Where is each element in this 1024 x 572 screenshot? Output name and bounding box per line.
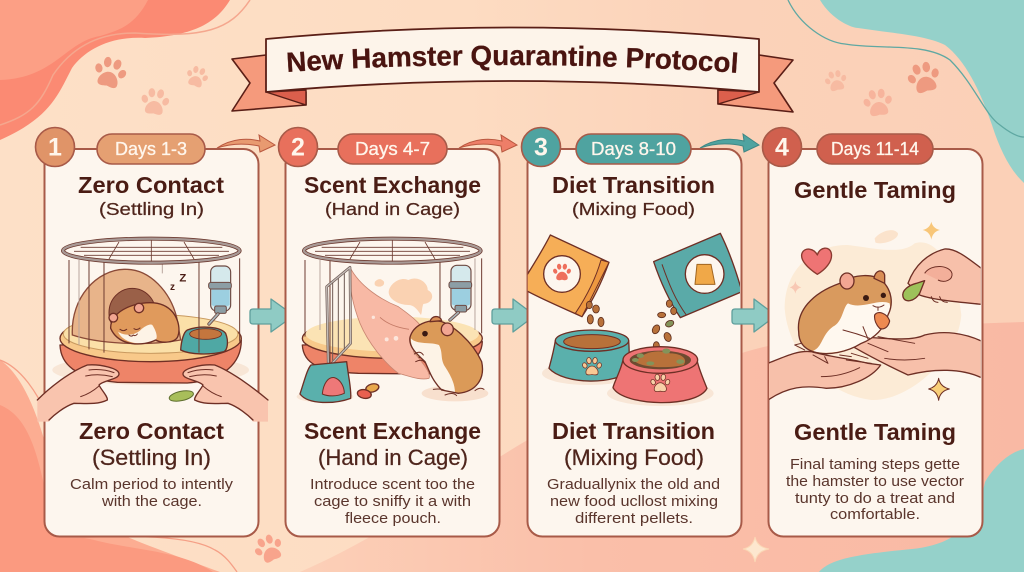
heading 2: Scent Exchange (304, 172, 481, 198)
lower subheading 1: (Settling In) (92, 445, 211, 470)
left hand (37, 365, 119, 422)
days pill 1 (97, 134, 205, 164)
description 4: comfortable. (830, 507, 920, 523)
illustration: hamster asleep in cage with hands outside: Z (179, 273, 186, 285)
heading 3: Diet Transition (552, 172, 715, 198)
days pill 1: Days 1-3 (115, 139, 187, 159)
description 3: new food ucllost mixing (550, 494, 718, 510)
number badge 1: 1 (48, 134, 62, 162)
description 4: Final taming steps gette (790, 457, 960, 473)
days pill 4 (817, 134, 933, 164)
card 4 (768, 149, 982, 536)
description 4: tunty to do a treat and (795, 491, 955, 507)
illustration: hamster asleep in cage with hands outside (37, 239, 268, 422)
description 4 (786, 457, 964, 523)
days pill 4: Days 11-14 (831, 139, 919, 159)
ribbon left tail (232, 55, 306, 111)
scent cloud (375, 278, 432, 315)
red bowl (607, 347, 714, 406)
panel 4: gentle taming (762, 128, 982, 536)
gold sparkle top (923, 222, 940, 240)
treats (357, 382, 380, 399)
days pill 2 (338, 134, 447, 164)
ribbon right tail (718, 55, 793, 112)
sparkle: bottom (743, 537, 769, 562)
heading 4: Gentle Taming (794, 177, 956, 203)
top-left wave blob (0, 0, 250, 140)
card 2 (286, 149, 500, 536)
curved arrow 1 to 2 (217, 135, 275, 152)
lower heading 2: Scent Exchange (304, 418, 481, 444)
title: New Hamster Quarantine Protocol (287, 46, 738, 73)
number badge 4: 4 (775, 134, 789, 162)
panel 2: scent exchange (278, 128, 500, 536)
description 1: with the cage. (101, 494, 202, 510)
card 1 (44, 149, 258, 536)
heading 1: Zero Contact (78, 172, 224, 198)
description 2: fleece pouch. (345, 511, 441, 527)
ribbon banner (266, 28, 759, 92)
curved arrow 2 to 3 (459, 135, 517, 152)
number badge 4 (762, 128, 802, 166)
description 4: the hamster to use vector (786, 474, 964, 490)
illustration: hand in cage with hamster sniffing (297, 239, 488, 403)
teal food bag (654, 233, 742, 318)
lower right hand (850, 333, 981, 378)
number badge 2: 2 (291, 134, 305, 162)
number badge 2 (278, 128, 318, 166)
illustration: food bags pouring into bowls (527, 233, 742, 406)
description 2 (310, 477, 475, 527)
decorative paw prints (90, 53, 944, 566)
number badge 3: 3 (534, 134, 548, 162)
number badge 1 (36, 128, 74, 166)
description 2: cage to sniffy it a with (314, 494, 471, 510)
teal bowl (542, 330, 635, 385)
lower heading 1: Zero Contact (79, 418, 224, 444)
lower heading 3: Diet Transition (552, 418, 715, 444)
number badge 3 (522, 128, 560, 166)
falling pellets (586, 300, 677, 350)
reaching hand (350, 267, 429, 379)
right hand (183, 365, 268, 422)
vegetable treat (903, 281, 925, 301)
panel 3: diet transition (522, 128, 742, 536)
days pill 3 (576, 134, 691, 164)
lower heading 4: Gentle Taming (794, 419, 956, 445)
bottom-right teal blob (819, 449, 1024, 572)
days pill 3: Days 8-10 (591, 139, 676, 159)
description 3: different pellets. (575, 511, 693, 527)
flow arrow 2 (492, 299, 535, 332)
subheading 1: (Settling In) (99, 199, 204, 219)
pink sparkle (790, 281, 801, 294)
description 3 (547, 477, 720, 527)
description 2: Introduce scent too the (310, 477, 475, 493)
fleece pouch (297, 362, 353, 403)
hamster (795, 271, 891, 363)
sleeping zzz: z (170, 282, 175, 293)
subheading 2: (Hand in Cage) (325, 199, 460, 219)
lower subheading 2: (Hand in Cage) (318, 445, 468, 470)
heart (802, 248, 832, 274)
soft glow backdrop (785, 242, 961, 400)
subheading 3: (Mixing Food) (572, 199, 695, 219)
ribbon left fold (266, 90, 306, 105)
card 3 (528, 149, 742, 536)
illustration: hamster eating on hands (768, 222, 981, 400)
lower left hand (768, 351, 881, 400)
ribbon right fold (718, 90, 759, 104)
title ribbon (231, 26, 794, 113)
hamster (410, 317, 488, 401)
upper right hand holding leaf (908, 249, 981, 304)
cage door (327, 267, 351, 367)
days pill 2: Days 4-7 (355, 139, 430, 159)
description 3: Graduallynix the old and (547, 477, 720, 493)
panel 1: zero contact (36, 128, 268, 536)
flow arrow 3 (732, 299, 776, 332)
top-right teal blob (788, 0, 1024, 183)
lower subheading 3: (Mixing Food) (564, 445, 704, 470)
flow arrow 1 (250, 299, 294, 332)
description 1: Calm period to intently (70, 477, 234, 493)
description 1 (70, 477, 234, 510)
orange food bag (527, 235, 609, 317)
bottom-left wave blob (0, 360, 237, 572)
leaf treat (168, 389, 194, 403)
curved arrow 3 to 4 (700, 134, 759, 152)
gold sparkle bottom (929, 378, 949, 400)
water bottle (449, 265, 472, 320)
